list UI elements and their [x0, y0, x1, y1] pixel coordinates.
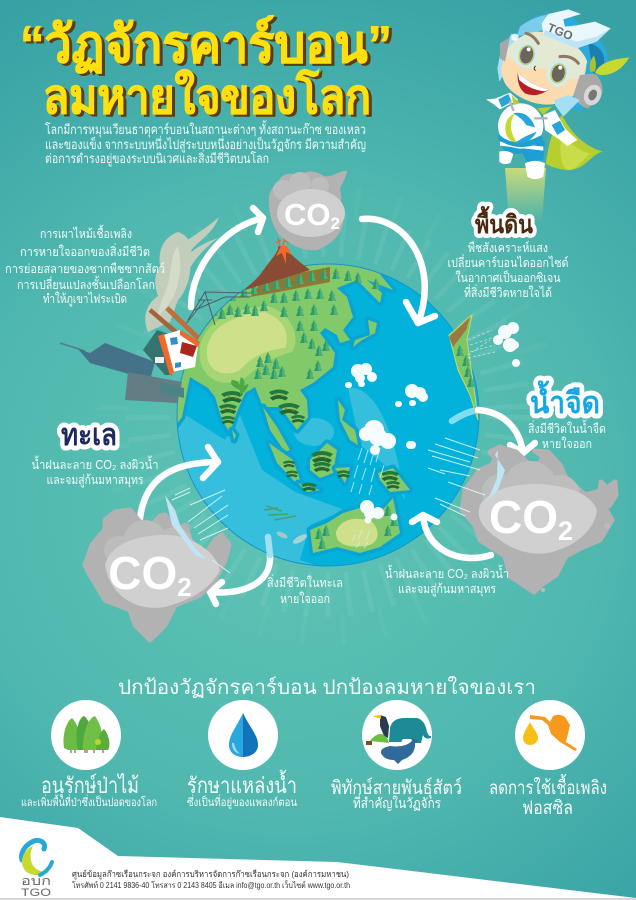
right CO2 cloud [462, 447, 616, 592]
ocean [186, 276, 478, 566]
mouth [518, 73, 549, 95]
top CO2 cloud: 2 [331, 214, 340, 233]
toucan [380, 715, 389, 738]
rays around globe [113, 200, 543, 630]
label: species: พิทักษ์สายพันธุ์สัตว์ [331, 777, 462, 800]
footer band [0, 817, 636, 900]
asia [178, 264, 396, 436]
logo: อบก [21, 874, 51, 888]
cape [546, 115, 603, 170]
label: fossil fuel: ลดการใช้เชื้อเพลิง [489, 774, 607, 799]
face [501, 32, 587, 105]
label: water: ซึ่งเป็นที่อยู่ของแพลงก์ตอน [187, 794, 297, 809]
text: land: พืชสังเคราะห์แสง [468, 241, 548, 255]
title [20, 15, 395, 126]
heading: freshwater: น้ำจืด [530, 380, 600, 420]
text: land: ในอากาศเป็นออกซิเจน [456, 270, 561, 285]
left CO2 cloud [85, 495, 230, 640]
cycle arrows [140, 208, 535, 604]
plateau patches [200, 306, 295, 383]
globe [178, 264, 478, 566]
label: water: รักษาแหล่งน้ำ [187, 770, 297, 798]
icon: wildlife [362, 700, 432, 770]
mascot [486, 9, 629, 179]
TGO wrench badge: TGO [546, 20, 575, 43]
japan [353, 320, 377, 347]
label: species: ที่สำคัญในวัฏจักร [353, 794, 441, 811]
text: rain dissolves CO2: และจมสู่ก้นมหาสมุทร [398, 582, 496, 597]
text: land: เปลี่ยนคาร์บอนไดออกไซด์ [448, 254, 568, 270]
arrow: sea life to left cloud [210, 555, 270, 604]
arrow: left cloud to ocean [140, 447, 218, 518]
house and chimneys [150, 308, 200, 376]
title: “วัฏจักรคาร์บอน” [20, 15, 392, 74]
cloud and rain right of globe [468, 322, 520, 367]
top CO2 cloud: CO [284, 197, 331, 232]
text: marine life: สิ่งมีชีวิตในทะเล [267, 574, 343, 590]
new guinea [378, 468, 410, 492]
title: “วัฏจักรคาร์บอน” [23, 17, 395, 76]
right CO2 cloud: CO [489, 491, 558, 543]
heading: sea: ทะเล [61, 419, 117, 452]
intro text: โลกมีการหมุนเวียนธาตุคาร์บอนในสถานะต่างๆ ทั้งสถานะก๊าซ ของเหลว [45, 120, 366, 138]
text: sea: น้ำฝนละลาย CO₂ ลงผิวน้ำ [32, 455, 158, 472]
label: fossil fuel [489, 774, 607, 819]
sulawesi [335, 467, 350, 483]
helmet [508, 13, 608, 112]
brown hatched slope [250, 267, 330, 297]
text: land: ที่สิ่งมีชีวิตหายใจได้ [464, 284, 552, 300]
arms [486, 93, 518, 109]
left text: emissions: การหายใจออกของสิ่งมีชีวิต [20, 243, 150, 259]
borneo [310, 443, 337, 478]
text: sea: และจมสู่ก้นมหาสมุทร [46, 473, 144, 488]
arrow: top cloud to earth [362, 219, 435, 323]
light shallow sea [170, 388, 405, 575]
title: ลมหายใจของโลก [46, 70, 374, 126]
arrow: emission to top cloud [191, 208, 263, 307]
intro text [45, 120, 366, 167]
section heading: ปกป้องวัฏจักรคาร์บอน ปกป้องลมหายใจของเรา [118, 676, 536, 699]
left text: emissions: การเผาไหม้เชื้อเพลิง [40, 224, 132, 241]
text: rain dissolves CO2 [385, 564, 509, 597]
intro text: ต่อการดำรงอยู่ของระบบนิเวศและสิ่งมีชีวิตบนโลก [45, 150, 269, 167]
java [298, 483, 320, 492]
jet trail [505, 168, 546, 222]
rice paddies [219, 390, 400, 491]
seaweed and fish [264, 506, 296, 520]
tree leaf icon on india [231, 377, 248, 395]
footer contact text: โทรศัพท์ 0 2141 9836-40 โทรสาร 0 2143 8405 อีเมล info@tgo.or.th เว็บไซต์ www.tgo.or.th [72, 880, 350, 890]
label: forest: และเพิ่มพื้นที่ป่าซึ่งเป็นปอดของโลก [21, 794, 157, 809]
footer contact text: ศูนย์ข้อมูลก๊าซเรือนกระจก องค์การบริหารจัดการก๊าซเรือนกระจก (องค์การมหาชน) [72, 869, 349, 880]
left text: emissions [5, 224, 165, 307]
globe clouds [345, 363, 428, 524]
left text: emissions: ทำให้ภูเขาไฟระเบิด [43, 292, 127, 307]
text: marine life: หายใจออก [280, 592, 330, 606]
heading: land: พื้นดิน [475, 205, 533, 239]
pylon [185, 292, 250, 325]
left text: emissions: การเปลี่ยนแปลงชั้นเปลือกโลก [17, 275, 155, 292]
rain lines near clouds [172, 438, 485, 540]
label: species [331, 777, 462, 811]
philippines [338, 400, 358, 445]
arrow: right cloud to ocean [412, 515, 491, 558]
title: ลมหายใจของโลก [43, 68, 371, 124]
icon: forest [51, 700, 121, 770]
rain lines over sea [351, 448, 384, 548]
forests [210, 268, 398, 549]
left CO2 cloud: 2 [177, 572, 192, 602]
text: sea [32, 455, 158, 488]
right CO2 cloud: 2 [558, 516, 573, 546]
text: freshwater [528, 419, 606, 451]
left CO2 cloud: CO [108, 547, 177, 599]
city buildings [60, 330, 184, 403]
intro text: และของแข็ง จากระบบหนึ่งไปสู่ระบบหนึ่งอย่างเป็นวัฏจักร มีความสำคัญ [45, 135, 366, 153]
TGO wrench badge [542, 9, 611, 48]
malay peninsula and sumatra [263, 407, 290, 452]
label: forest: อนุรักษ์ป่าไม้ [41, 773, 139, 799]
text: marine life [267, 574, 343, 606]
eyes [512, 39, 541, 71]
footer contact text [72, 869, 350, 890]
labels under icons [21, 770, 607, 819]
leaf [590, 56, 596, 72]
top CO2 cloud [269, 171, 347, 250]
label: water [187, 770, 297, 809]
icon: fuel nozzle [515, 700, 585, 770]
land masses [160, 250, 410, 553]
text: freshwater: หายใจออก [542, 437, 592, 451]
label: fossil fuel: ฟอสซิล [522, 798, 573, 819]
left text: emissions: การย่อยสลายของซากพืชซากสัตว์ [5, 262, 165, 276]
text: rain dissolves CO2: น้ำฝนละลาย CO₂ ลงผิวน้ำ [385, 564, 509, 581]
icon: water drop [208, 700, 278, 770]
text: freshwater: สิ่งมีชีวิตในน้ำจืด [528, 419, 606, 436]
smoke [145, 217, 219, 332]
label: forest [21, 773, 157, 809]
logo [21, 840, 52, 899]
arrow: freshwater [478, 410, 535, 453]
volcano [245, 235, 310, 290]
body [498, 103, 543, 149]
whale [381, 738, 420, 764]
text: land [448, 241, 568, 300]
elephant [389, 718, 431, 743]
headphones [500, 37, 510, 62]
east coast land [449, 315, 478, 420]
pale water band at right edge [452, 410, 478, 421]
logo: TGO [21, 887, 52, 899]
legs [499, 137, 545, 162]
turtle [370, 734, 389, 743]
sri lanka and small islands [232, 430, 236, 440]
australia [310, 498, 400, 553]
